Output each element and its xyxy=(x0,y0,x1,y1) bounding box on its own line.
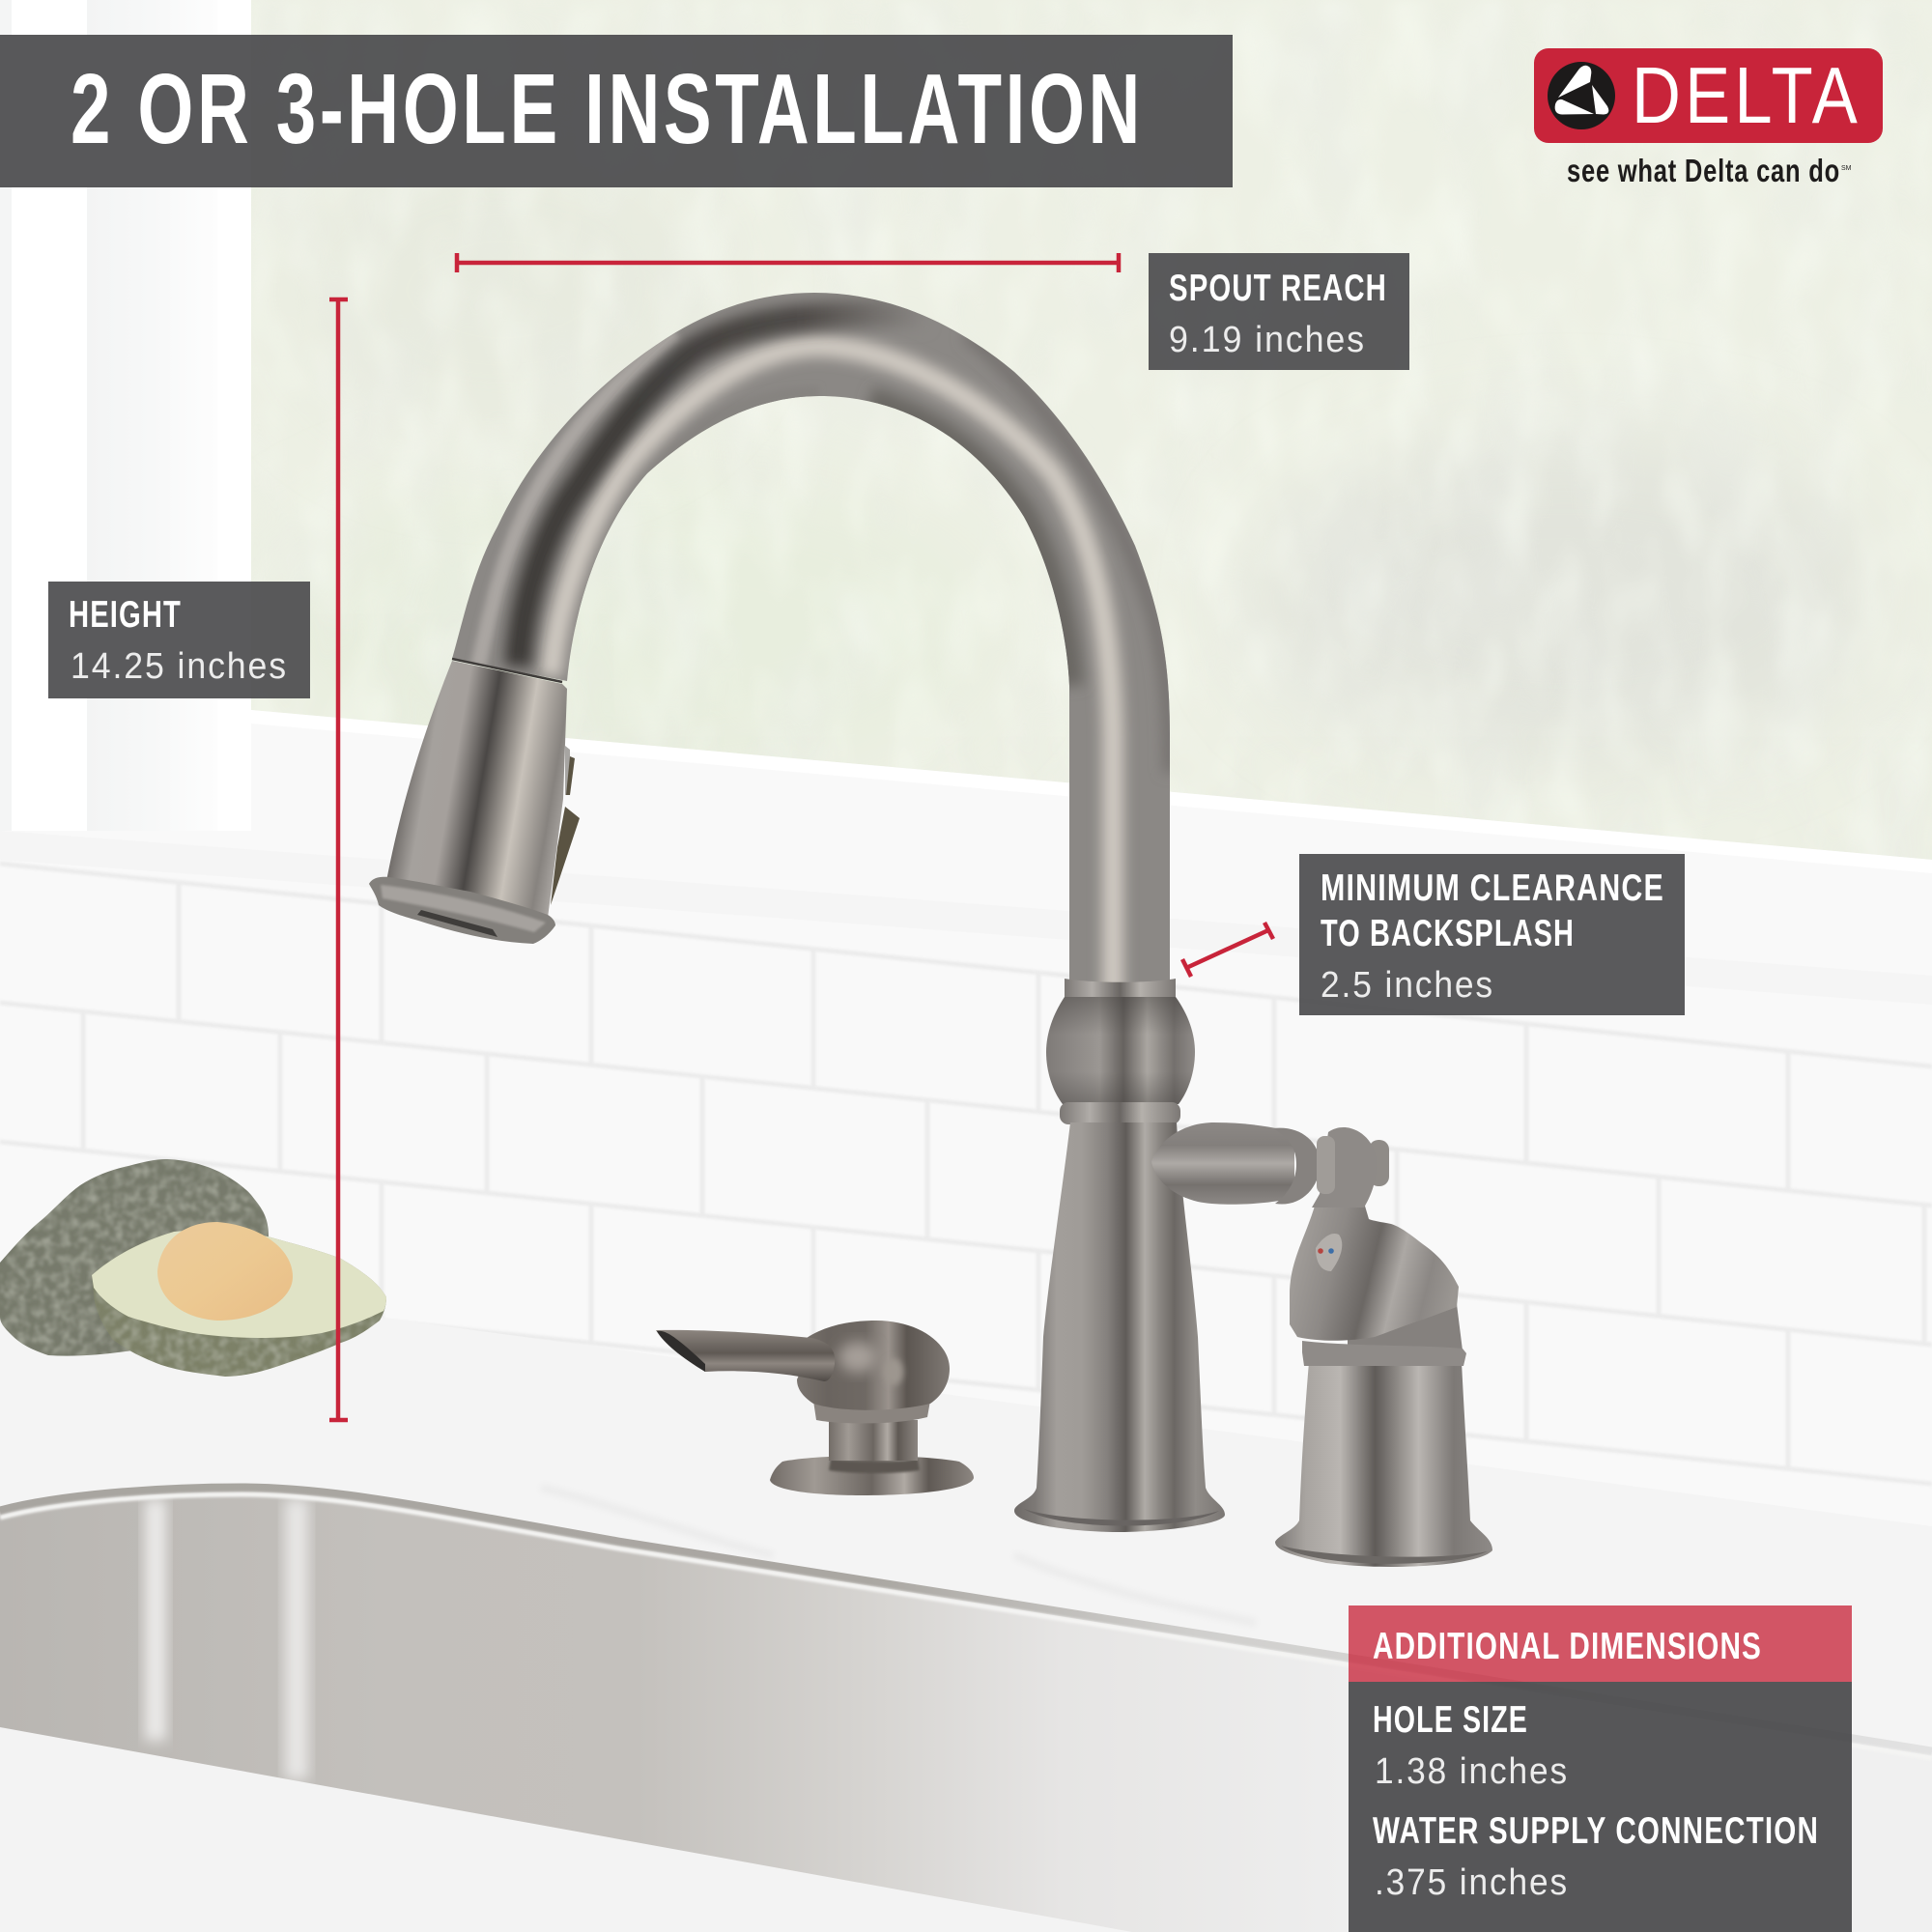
blurred window view xyxy=(251,0,1932,869)
lever xyxy=(1151,1122,1294,1205)
stainless sink xyxy=(0,1485,1932,1932)
callout: height: 14.25 inches xyxy=(71,646,288,687)
panel heading: ADDITIONAL DIMENSIONS xyxy=(1373,1626,1762,1667)
lever end cap xyxy=(1369,1140,1389,1186)
dispenser head xyxy=(797,1321,950,1410)
panel body: 1.38 inches xyxy=(1375,1751,1569,1792)
subway tile wall xyxy=(0,864,1932,1484)
dispenser stem xyxy=(829,1420,918,1461)
lever ball and neck xyxy=(1312,1127,1377,1208)
dispenser nozzle xyxy=(656,1330,835,1381)
title text: 2 OR 3-HOLE INSTALLATION xyxy=(71,53,1144,164)
callout: spout reach: 9.19 inches xyxy=(1169,320,1366,360)
under-cap body xyxy=(1348,1304,1463,1357)
service mark: SM xyxy=(1841,165,1852,172)
main faucet xyxy=(369,270,1225,1532)
panel body xyxy=(1349,1682,1852,1932)
dispenser collar xyxy=(813,1401,930,1423)
spray head trigger xyxy=(551,746,580,905)
tapered column xyxy=(1014,1122,1225,1532)
gooseneck spout xyxy=(452,293,1170,982)
panel heading xyxy=(1349,1605,1852,1682)
dispenser base xyxy=(770,1456,974,1495)
callout: minimum clearance: TO BACKSPLASH xyxy=(1321,913,1575,954)
callout: height: HEIGHT xyxy=(69,594,182,636)
panel body: HOLE SIZE xyxy=(1373,1699,1528,1741)
callout: minimum clearance xyxy=(1299,854,1685,1015)
callout: spout reach xyxy=(1149,253,1409,370)
title banner xyxy=(0,35,1233,187)
half avocado skin xyxy=(92,1231,386,1377)
temperature badge xyxy=(1316,1234,1342,1271)
lower ring xyxy=(1060,1102,1180,1124)
column flange shading xyxy=(1024,1509,1219,1526)
spout reach line xyxy=(457,253,1119,272)
body dome xyxy=(1290,1203,1459,1341)
panel body: .375 inches xyxy=(1375,1862,1569,1903)
callout: minimum clearance: 2.5 inches xyxy=(1321,965,1494,1006)
window frame xyxy=(0,0,251,831)
handle assembly xyxy=(1151,1122,1492,1567)
pull-down spray head xyxy=(386,661,567,918)
red badge xyxy=(1534,48,1883,143)
whole avocado xyxy=(0,1159,269,1356)
Delta logo xyxy=(1534,48,1883,188)
marble counter xyxy=(0,1280,1932,1932)
triangle mark xyxy=(1548,62,1615,129)
avocado pit xyxy=(157,1222,293,1321)
spray head lip xyxy=(369,877,555,944)
lever collar xyxy=(1273,1128,1335,1205)
half avocado flesh xyxy=(92,1231,386,1338)
soap dispenser xyxy=(656,1321,974,1495)
bulb body xyxy=(1046,997,1195,1104)
tagline: see what Delta can do xyxy=(1567,153,1840,188)
red dimension lines xyxy=(329,253,1273,1420)
panel: additional dimensions xyxy=(1349,1605,1852,1932)
callout: height xyxy=(48,582,310,698)
lower body xyxy=(1275,1362,1492,1567)
callout: minimum clearance: MINIMUM CLEARANCE xyxy=(1321,867,1664,909)
backsplash clearance line xyxy=(1182,923,1273,977)
flange shading xyxy=(1281,1546,1488,1564)
body ring xyxy=(1302,1341,1466,1366)
Delta wordmark: DELTA xyxy=(1632,50,1861,140)
top collar xyxy=(1065,979,1176,1001)
height line xyxy=(329,299,348,1420)
avocado xyxy=(0,1159,386,1377)
callout: spout reach: SPOUT REACH xyxy=(1169,268,1387,309)
sill edge highlight xyxy=(251,710,1932,873)
